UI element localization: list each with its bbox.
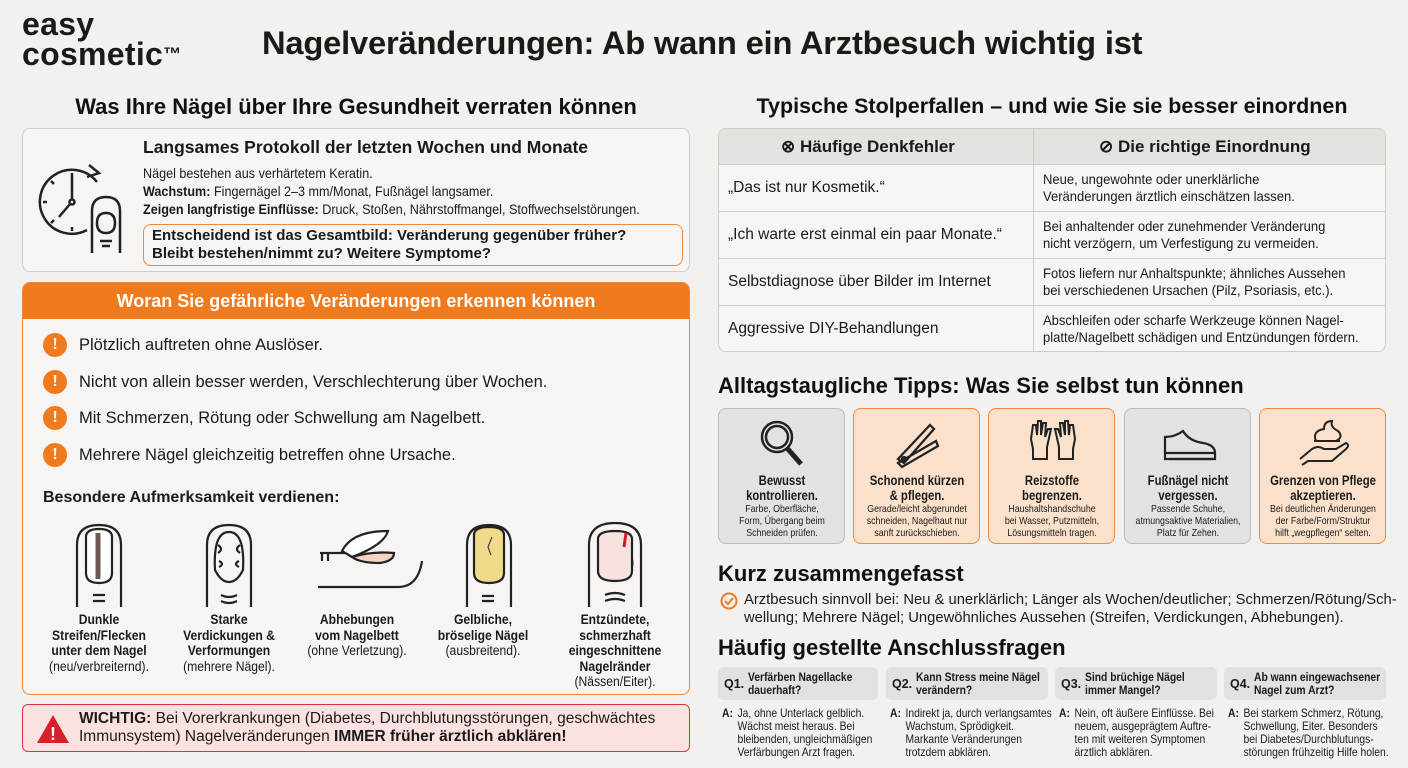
row 4: Aggressive DIY-Behandlungen bbox=[728, 320, 939, 337]
card 5: der Farbe/Form/Struktur bbox=[1276, 515, 1370, 527]
card 4 bbox=[1124, 408, 1251, 544]
label: dunkle streifen bbox=[49, 612, 149, 674]
faq a1: A: bbox=[722, 706, 733, 720]
label: abhebungen: Abhebungen bbox=[320, 612, 394, 627]
card 2: schneiden, Nagelhaut nur bbox=[867, 515, 967, 527]
card 4: Platz für Zehen. bbox=[1157, 527, 1219, 539]
label: dunkle streifen: unter dem Nagel bbox=[51, 643, 147, 658]
faq a3: neuem, ausgeprägtem Auftre- bbox=[1074, 719, 1211, 733]
label: dunkle streifen: Dunkle bbox=[79, 612, 119, 627]
logo: cosmetic™ bbox=[22, 36, 181, 72]
card 5: Bei deutlichen Änderungen bbox=[1270, 503, 1376, 515]
label: gelbliche: bröselige Nägel bbox=[438, 628, 528, 642]
row 4: platte/Nagelbett schädigen und Entzündungen fördern. bbox=[1043, 329, 1359, 345]
label: abhebungen: vom Nagelbett bbox=[315, 628, 399, 642]
label: verdickungen: Starke bbox=[210, 612, 248, 627]
card 3: bei Wasser, Putzmitteln, bbox=[1005, 515, 1099, 527]
faq q2: Q2. bbox=[892, 677, 912, 691]
bullet 3: ! bbox=[52, 409, 58, 426]
bullet 2: ! bbox=[52, 373, 58, 390]
row 3: Fotos liefern nur Anhaltspunkte; ähnliches Aussehen bbox=[1043, 265, 1346, 281]
faq a2: trotzdem abklären. bbox=[905, 745, 991, 759]
faq q2: verändern? bbox=[916, 683, 972, 697]
row 2: Bei anhaltender oder zunehmender Veränderung bbox=[1043, 218, 1325, 234]
faq q3 bbox=[1055, 667, 1217, 700]
callout: gesamtbild bbox=[143, 224, 683, 266]
card 1: Form, Übergang beim bbox=[739, 515, 825, 527]
table header bbox=[719, 129, 1385, 165]
card 1: kontrollieren. bbox=[746, 488, 818, 503]
label: abhebungen bbox=[307, 612, 407, 658]
row 2 bbox=[718, 211, 1386, 258]
faq q4: Q4. bbox=[1230, 677, 1250, 691]
card 5: hilft „wegpflegen“ selten. bbox=[1275, 527, 1371, 539]
faq a1: bleibenden, ungleichmäßigen bbox=[737, 732, 872, 746]
label: verdickungen: (mehrere Nägel). bbox=[183, 658, 275, 674]
warning box bbox=[22, 704, 690, 752]
faq q1 bbox=[718, 667, 878, 700]
card 2: sanft zurückschieben. bbox=[874, 527, 960, 539]
card 4: Passende Schuhe, bbox=[1151, 503, 1225, 515]
header bar bbox=[23, 283, 689, 319]
row 4: Abschleifen oder scharfe Werkzeuge können Nagel- bbox=[1043, 312, 1344, 328]
bullet 4: Mehrere Nägel gleichzeitig betreffen ohne Ursache. bbox=[79, 446, 456, 464]
row 3: Selbstdiagnose über Bilder im Internet bbox=[728, 273, 991, 290]
bullet 2: Nicht von allein besser werden, Verschlechterung über Wochen. bbox=[79, 372, 547, 390]
faq q1: dauerhaft? bbox=[748, 683, 801, 697]
card 3: Haushaltshandschuhe bbox=[1008, 503, 1096, 515]
faq a3: A: bbox=[1059, 706, 1070, 720]
label: entzündete: Nagelränder bbox=[580, 658, 650, 674]
card 1 bbox=[718, 408, 845, 544]
label: entzündete: schmerzhaft bbox=[579, 628, 651, 642]
row 2: „Ich warte erst einmal ein paar Monate.“ bbox=[728, 226, 1002, 243]
row 3: bei verschiedenen Ursachen (Pilz, Psoriasis, etc.). bbox=[1043, 282, 1333, 298]
card 4: Fußnägel nicht bbox=[1148, 473, 1228, 488]
callout: gesamtbild: Entscheidend ist das Gesamtbild: Veränderung gegenüber früher? bbox=[152, 227, 626, 244]
heading: kurz: Kurz zusammengefasst bbox=[718, 561, 964, 586]
faq q2: Kann Stress meine Nägel bbox=[916, 670, 1040, 684]
row 2: nicht verzögern, um Verfestigung zu vermeiden. bbox=[1043, 235, 1319, 251]
heading: tipps: Alltagstaugliche Tipps: Was Sie selbst tun können bbox=[718, 373, 1244, 398]
card 1: Schneiden prüfen. bbox=[746, 527, 818, 539]
faq a4: störungen frühzeitig Hilfe holen. bbox=[1243, 745, 1389, 759]
text: protokoll bbox=[143, 137, 640, 217]
heading: right: Typische Stolperfallen – und wie Sie sie besser einordnen bbox=[756, 94, 1348, 118]
label: dunkle streifen: Streifen/Flecken bbox=[52, 628, 146, 642]
bullet 2 bbox=[43, 370, 547, 394]
row 4 bbox=[718, 305, 1386, 352]
faq a3 bbox=[1059, 706, 1214, 759]
faq q4: Ab wann eingewachsener bbox=[1254, 670, 1380, 684]
header bar: Woran Sie gefährliche Veränderungen erkennen können bbox=[117, 291, 595, 311]
faq a2: A: bbox=[890, 706, 901, 720]
card 2: Gerade/leicht abgerundet bbox=[867, 503, 967, 515]
icon: warning: ! bbox=[50, 724, 56, 744]
text: protokoll: Wachstum: Fingernägel 2–3 mm/Monat, Fußnägel langsamer. bbox=[143, 183, 493, 199]
label: entzündete: eingeschnittene bbox=[569, 643, 661, 658]
bullet 4 bbox=[43, 443, 456, 467]
card 2: Schonend kürzen bbox=[870, 473, 964, 488]
label: entzündete: (Nässen/Eiter). bbox=[574, 674, 656, 689]
panel: gefährliche Veränderungen bbox=[22, 282, 690, 695]
row 1 bbox=[718, 164, 1386, 211]
faq a2 bbox=[890, 706, 1052, 759]
row 3 bbox=[718, 258, 1386, 305]
label: entzündete bbox=[569, 612, 661, 689]
faq a4: bei Diabetes/Durchblutungs- bbox=[1243, 732, 1374, 746]
card 1: Farbe, Oberfläche, bbox=[745, 503, 819, 515]
label: gelbliche: (ausbreitend). bbox=[446, 643, 520, 658]
faq q4 bbox=[1224, 667, 1386, 700]
faq a3: ärztlich abklären. bbox=[1074, 745, 1152, 759]
heading: faq: Häufig gestellte Anschlussfragen bbox=[718, 635, 1066, 660]
faq a2: Indirekt ja, durch verlangsamtes bbox=[905, 706, 1052, 720]
bullet 1: Plötzlich auftreten ohne Auslöser. bbox=[79, 336, 323, 354]
label: dunkle streifen: (neu/verbreiternd). bbox=[49, 658, 149, 674]
label: gelbliche bbox=[438, 612, 528, 658]
label: entzündete: Entzündete, bbox=[581, 612, 649, 627]
faq q1: Verfärben Nagellacke bbox=[748, 670, 852, 684]
row 1: „Das ist nur Kosmetik.“ bbox=[728, 179, 885, 196]
card 5: Grenzen von Pflege bbox=[1270, 473, 1376, 488]
faq a1: Wächst meist heraus. Bei bbox=[737, 719, 854, 733]
label: gelbliche: Gelbliche, bbox=[454, 612, 512, 627]
bullet 1: ! bbox=[52, 336, 58, 353]
faq a4: Bei starkem Schmerz, Rötung, bbox=[1243, 706, 1383, 720]
text: warning: WICHTIG: Bei Vorerkrankungen (Diabetes, Durchblutungsstörungen, geschwächtes Immunsystem) Nagelveränderungen IMMER früher ärztlich abklären! bbox=[79, 710, 655, 745]
title: Nagelveränderungen: Ab wann ein Arztbesuch wichtig ist bbox=[262, 24, 1142, 61]
faq q3: immer Mangel? bbox=[1085, 683, 1161, 697]
bullet 1 bbox=[43, 333, 323, 357]
label: verdickungen: Verdickungen & bbox=[183, 628, 275, 642]
text: protokoll: Zeigen langfristige Einflüsse: Druck, Stoßen, Nährstoffmangel, Stoffwechselstörungen. bbox=[143, 201, 640, 217]
faq q1: Q1. bbox=[724, 677, 744, 691]
faq q2 bbox=[886, 667, 1048, 700]
logo bbox=[22, 6, 181, 72]
faq a4: A: bbox=[1228, 706, 1239, 720]
card 2: & pflegen. bbox=[890, 488, 944, 503]
card 5 bbox=[1259, 408, 1386, 544]
faq a4: Schwellung, Eiter. Besonders bbox=[1243, 719, 1378, 733]
callout: gesamtbild: Bleibt bestehen/nimmt zu? Weitere Symptome? bbox=[152, 245, 491, 262]
faq a4 bbox=[1228, 706, 1389, 759]
table header: ⊗ Häufige Denkfehler bbox=[781, 137, 955, 156]
icon: warning bbox=[37, 715, 69, 744]
row 1: Veränderungen ärztlich einschätzen lassen. bbox=[1043, 188, 1295, 204]
card 2 bbox=[853, 408, 980, 544]
icon: check bbox=[720, 592, 738, 610]
label: abhebungen: (ohne Verletzung). bbox=[307, 643, 407, 658]
card 3: Reizstoffe bbox=[1025, 473, 1079, 488]
faq a1: Verfärbungen Arzt fragen. bbox=[737, 745, 855, 759]
logo: easy bbox=[22, 6, 94, 42]
faq a3: ten mit weiteren Symptomen bbox=[1074, 732, 1205, 746]
text: protokoll: Langsames Protokoll der letzten Wochen und Monate bbox=[143, 137, 588, 157]
icons: nails bbox=[76, 522, 642, 607]
faq q3: Q3. bbox=[1061, 677, 1081, 691]
card 5: akzeptieren. bbox=[1290, 488, 1356, 503]
card 4: atmungsaktive Materialien, bbox=[1136, 515, 1240, 527]
bullet 3: Mit Schmerzen, Rötung oder Schwellung am Nagelbett. bbox=[79, 408, 485, 426]
card 3: Lösungsmitteln tragen. bbox=[1007, 527, 1097, 539]
subheading: Besondere Aufmerksamkeit verdienen: bbox=[43, 489, 339, 506]
icon: clock finger bbox=[38, 164, 122, 253]
table bbox=[718, 128, 1386, 352]
table header: ⊘ Die richtige Einordnung bbox=[1099, 137, 1311, 156]
bullet 3 bbox=[43, 406, 485, 430]
card 1: Bewusst bbox=[759, 473, 805, 488]
bullet 4: ! bbox=[52, 446, 58, 463]
faq a2: Wachstum, Sprödigkeit. bbox=[905, 719, 1014, 733]
faq a1 bbox=[722, 706, 872, 759]
faq q4: Nagel zum Arzt? bbox=[1254, 683, 1334, 697]
faq a3: Nein, oft äußere Einflüsse. Bei bbox=[1074, 706, 1214, 720]
panel: protokoll bbox=[22, 128, 690, 272]
summary: Arztbesuch sinnvoll bei: Neu & unerklärlich; Länger als Wochen/deutlicher; Schmerzen/Rötung/Sch- bbox=[744, 591, 1397, 608]
text: protokoll: Nägel bestehen aus verhärtetem Keratin. bbox=[143, 165, 373, 181]
label: verdickungen bbox=[183, 612, 275, 674]
heading: left: Was Ihre Nägel über Ihre Gesundheit verraten können bbox=[75, 94, 637, 119]
row 1: Neue, ungewohnte oder unerklärliche bbox=[1043, 171, 1259, 187]
faq a2: Markante Veränderungen bbox=[905, 732, 1022, 746]
summary: wellung; Mehrere Nägel; Ungewöhnliches Aussehen (Streifen, Verdickungen, Abhebungen). bbox=[744, 608, 1344, 626]
label: verdickungen: Verformungen bbox=[188, 643, 270, 658]
card 4: vergessen. bbox=[1158, 488, 1218, 503]
faq q3: Sind brüchige Nägel bbox=[1085, 670, 1185, 684]
summary bbox=[720, 591, 1397, 626]
faq a1: Ja, ohne Unterlack gelblich. bbox=[737, 706, 864, 720]
card 3: begrenzen. bbox=[1022, 488, 1082, 503]
card 3 bbox=[988, 408, 1115, 544]
